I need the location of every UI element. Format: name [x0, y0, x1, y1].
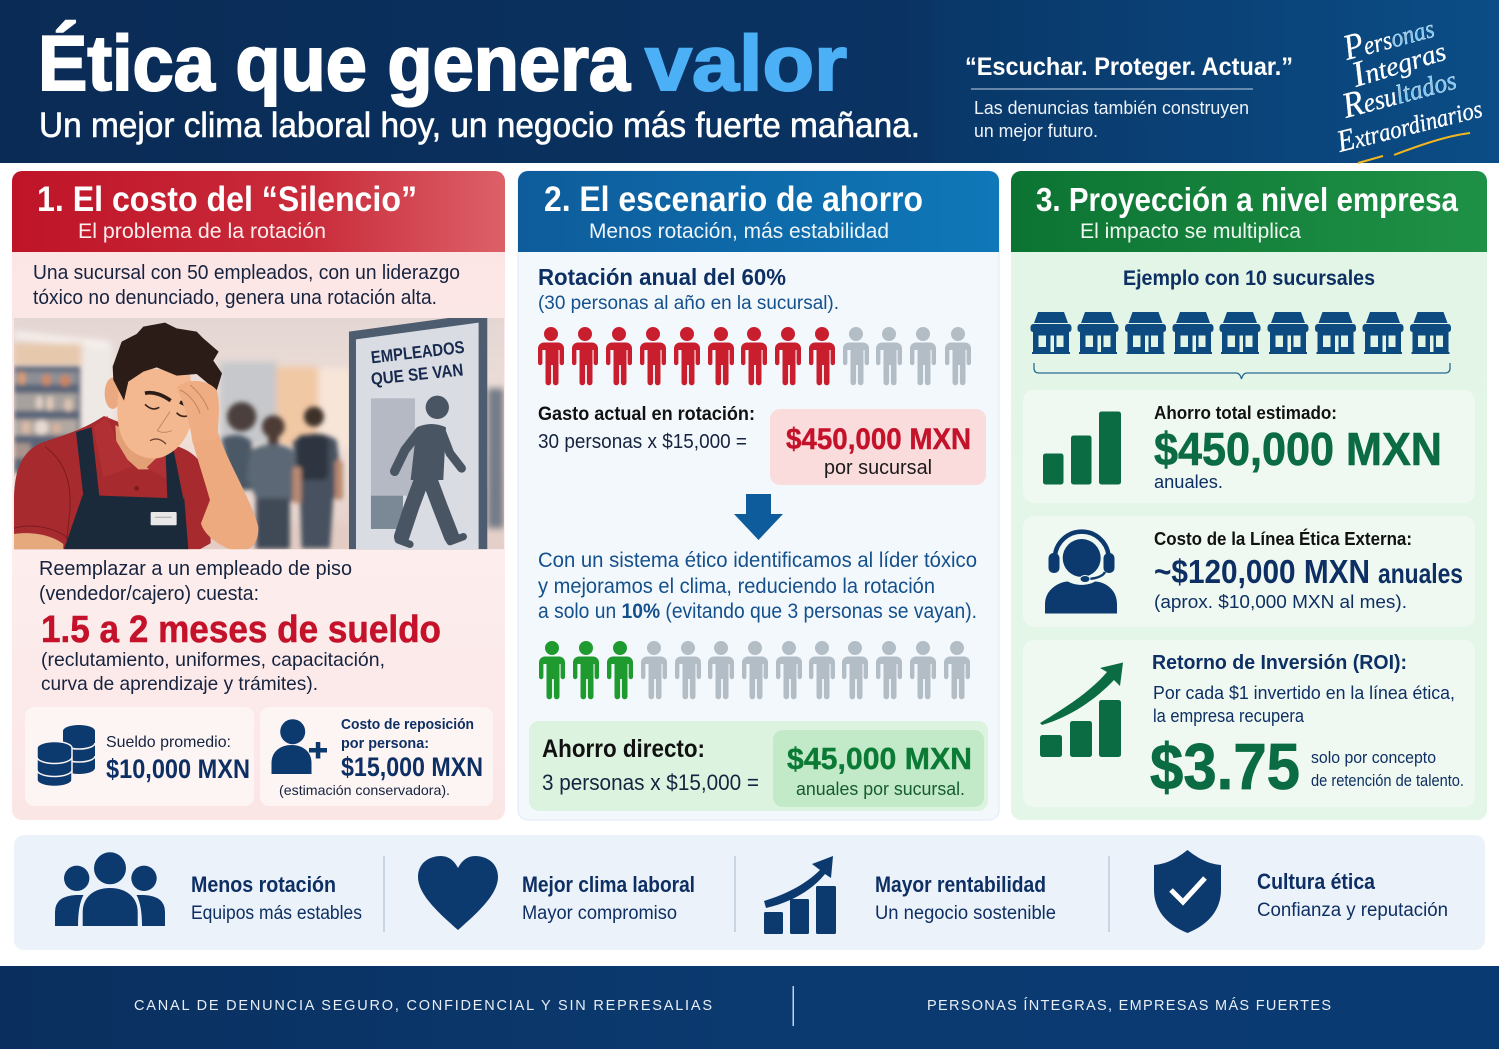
benefit: cultura ética — [1154, 850, 1448, 933]
exit sign — [349, 313, 487, 549]
card: sueldo promedio: $10,000 MXN — [106, 754, 250, 784]
panel 2 header — [518, 171, 999, 252]
replacement cost text: (reclutamiento, uniformes, capacitación, — [41, 649, 385, 671]
benefit: clima laboral — [418, 856, 695, 930]
card: ahorro total: Ahorro total estimado: — [1154, 403, 1337, 423]
rotation stat: (30 personas al año en la sucursal). — [538, 293, 839, 314]
intro text: tóxico no denunciado, genera una rotación alta. — [33, 287, 437, 309]
benefits strip — [14, 835, 1485, 950]
header band — [0, 0, 1499, 163]
quote block: Las denuncias también construyen — [974, 98, 1249, 118]
exit sign: QUE SE VAN — [370, 359, 464, 389]
panel 2 header: 2. El escenario de ahorro — [544, 180, 923, 219]
employee figure — [14, 323, 258, 551]
card: retorno de inversión: solo por concepto — [1311, 748, 1436, 767]
callout: 450,000 por sucursal: $450,000 MXN — [786, 423, 971, 456]
benefit: menos rotación: Equipos más estables — [191, 903, 362, 924]
subtitle: Un mejor clima laboral hoy, un negocio más fuerte mañana. — [39, 106, 920, 145]
benefit: rentabilidad: Un negocio sostenible — [875, 903, 1056, 924]
icon: growth chart — [1040, 662, 1123, 757]
card: costo línea ética: anuales — [1378, 558, 1463, 589]
panel 3 header: El impacto se multiplica — [1080, 220, 1301, 243]
quote block: un mejor futuro. — [974, 121, 1098, 141]
card: retorno de inversión: de retención de talento. — [1311, 771, 1464, 790]
card: costo línea ética: (aprox. $10,000 MXN al mes). — [1154, 592, 1407, 612]
panel 2 header: Menos rotación, más estabilidad — [589, 220, 889, 243]
benefit: cultura ética: Cultura ética — [1257, 869, 1376, 894]
footer band: PERSONAS ÍNTEGRAS, EMPRESAS MÁS FUERTES — [927, 997, 1331, 1014]
card: costo de reposición: (estimación conservadora). — [279, 782, 450, 798]
footer band: CANAL DE DENUNCIA SEGURO, CONFIDENCIAL Y SIN REPRESALIAS — [134, 998, 712, 1014]
callout: 450,000 por sucursal: por sucursal — [824, 457, 932, 479]
icon row: stores — [1030, 312, 1451, 354]
panel 1 header: 1. El costo del “Silencio” — [37, 180, 417, 219]
callout: ahorro directo: 3 personas x $15,000 = — [542, 770, 759, 795]
benefit: rentabilidad — [764, 856, 1056, 934]
card: costo de reposición: por persona: — [341, 735, 429, 752]
replacement cost text: curva de aprendizaje y trámites). — [41, 673, 318, 695]
benefit: menos rotación — [55, 852, 362, 926]
replacement cost text: Reemplazar a un empleado de piso — [39, 558, 352, 580]
callout: ahorro directo: Ahorro directo: — [542, 735, 705, 763]
panel 1 header — [12, 171, 505, 252]
pictogram: people leaving — [538, 327, 971, 385]
arrow down — [734, 494, 783, 540]
icon: person plus — [272, 719, 327, 774]
script slogan: Extraordinarios — [1332, 89, 1485, 159]
panel: proyección a nivel empresa — [1011, 171, 1487, 820]
card: costo línea ética — [1023, 516, 1475, 627]
icon: team — [55, 852, 165, 926]
footer band — [0, 966, 1499, 1049]
icon: headset agent — [1045, 532, 1117, 614]
walking figure — [395, 432, 463, 544]
script slogan: Resultados — [1337, 57, 1460, 126]
callout: 450,000 por sucursal — [770, 409, 986, 485]
title: Ética que genera — [38, 19, 631, 107]
replacement cost text — [39, 558, 441, 695]
card: retorno de inversión: la empresa recupera — [1153, 706, 1305, 726]
replacement cost text: 1.5 a 2 meses de sueldo — [41, 609, 441, 651]
panel 3 header — [1011, 171, 1487, 252]
panel: el escenario de ahorro — [518, 171, 999, 820]
current expense — [538, 403, 755, 453]
example heading: Ejemplo con 10 sucursales — [1123, 267, 1375, 290]
script slogan: Integras — [1346, 28, 1450, 95]
blurred walking staff — [227, 402, 256, 431]
pictogram: people retained — [539, 641, 970, 699]
script slogan — [1332, 5, 1485, 163]
script slogan: Personas — [1338, 5, 1438, 68]
ethical system text: a solo un 10% (evitando que 3 personas se vayan). — [538, 600, 977, 623]
benefit: clima laboral: Mayor compromiso — [522, 903, 677, 924]
card: retorno de inversión: Por cada $1 invertido en la línea ética, — [1153, 683, 1455, 703]
card: ahorro total — [1023, 390, 1475, 503]
card: costo de reposición: Costo de reposición — [341, 716, 474, 733]
illustration: stressed employee and leaving staff — [14, 313, 504, 551]
icon: coins — [37, 725, 95, 787]
card: retorno de inversión — [1023, 640, 1475, 807]
benefit: clima laboral: Mejor clima laboral — [522, 872, 695, 897]
card: sueldo promedio: Sueldo promedio: — [106, 734, 231, 751]
replacement cost text: (vendedor/cajero) cuesta: — [39, 583, 259, 605]
panel 3 header: 3. Proyección a nivel empresa — [1036, 181, 1459, 218]
card: costo línea ética: Costo de la Línea Ética Externa: — [1154, 528, 1412, 549]
ethical system text: Con un sistema ético identificamos al líder tóxico — [538, 549, 977, 572]
benefit: cultura ética: Confianza y reputación — [1257, 900, 1448, 921]
benefit: rentabilidad: Mayor rentabilidad — [875, 872, 1046, 897]
card: costo de reposición: $15,000 MXN — [341, 752, 483, 782]
ethical system text — [538, 549, 977, 623]
icon: rising bars — [764, 856, 836, 934]
panel 1 header: El problema de la rotación — [78, 220, 326, 243]
icon: bars — [1043, 412, 1121, 484]
card: retorno de inversión: $3.75 — [1150, 730, 1300, 803]
card: costo de reposición — [260, 707, 493, 806]
rotation stat — [538, 264, 839, 314]
card: retorno de inversión: Retorno de Inversión (ROI): — [1152, 652, 1407, 674]
rotation stat: Rotación anual del 60% — [538, 264, 786, 290]
benefit: menos rotación: Menos rotación — [191, 872, 336, 897]
callout: ahorro directo — [529, 721, 988, 811]
card: sueldo promedio — [25, 707, 254, 806]
exit sign: EMPLEADOS — [370, 337, 465, 367]
card: ahorro total: $450,000 MXN — [1154, 423, 1442, 475]
ethical system text: y mejoramos el clima, reduciendo la rotación — [538, 575, 935, 598]
callout: ahorro directo: $45,000 MXN — [787, 741, 972, 776]
brace — [1034, 363, 1450, 379]
intro text — [33, 262, 460, 309]
quote block — [965, 53, 1293, 141]
current expense: 30 personas x $15,000 = — [538, 431, 747, 453]
panel: el costo del silencio — [12, 171, 505, 820]
icon: shield check — [1154, 850, 1221, 933]
title: valor — [645, 19, 847, 107]
card: ahorro total: anuales. — [1154, 472, 1223, 492]
card: costo línea ética: ~$120,000 MXN — [1154, 553, 1370, 590]
callout: ahorro directo: anuales por sucursal. — [796, 779, 965, 799]
icon: heart — [418, 856, 498, 930]
current expense: Gasto actual en rotación: — [538, 403, 755, 425]
quote block: “Escuchar. Proteger. Actuar.” — [965, 53, 1293, 81]
intro text: Una sucursal con 50 empleados, con un liderazgo — [33, 262, 460, 284]
